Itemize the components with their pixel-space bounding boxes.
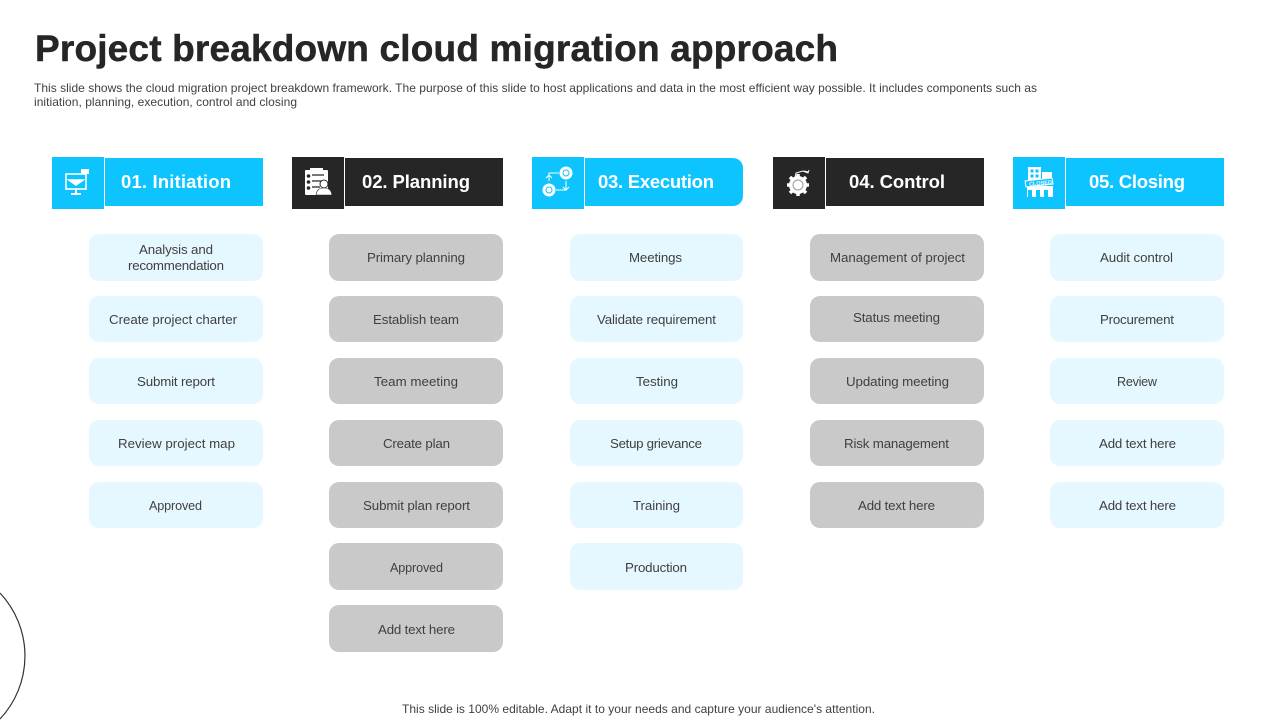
title: Project breakdown cloud migration approach bbox=[35, 28, 838, 69]
panel: 02 planning bbox=[292, 157, 503, 652]
step: team meeting: Team meeting bbox=[374, 374, 458, 389]
step: testing bbox=[570, 358, 743, 404]
step: risk management: Risk management bbox=[844, 436, 949, 451]
panel: 03 execution bbox=[532, 157, 743, 590]
step: status meeting: Status meeting bbox=[853, 310, 940, 325]
header: 02 planning: 02. Planning bbox=[362, 171, 470, 192]
footer note: This slide is 100% editable. Adapt it to your needs and capture your audience's attention. bbox=[402, 702, 875, 716]
step: analysis and recommendation bbox=[89, 234, 263, 281]
header: 04 control bbox=[773, 157, 984, 209]
step: add text here: Add text here bbox=[378, 622, 455, 637]
step: management of project bbox=[810, 234, 984, 281]
header: 01 initiation: 01. Initiation bbox=[121, 171, 231, 192]
step: meetings: Meetings bbox=[629, 250, 682, 265]
step: analysis and recommendation: recommendation bbox=[128, 258, 224, 273]
header: 05 closing bbox=[1013, 157, 1224, 209]
description text: This slide shows the cloud migration project breakdown framework. The purpose of this slide to host applications and data in the most efficient way possible. It includes components such as bbox=[34, 81, 1037, 95]
step: submit report: Submit report bbox=[137, 374, 215, 389]
step: review bbox=[1050, 358, 1224, 404]
description text bbox=[34, 81, 1037, 109]
panel: 04 control bbox=[773, 157, 984, 528]
step: primary planning bbox=[329, 234, 503, 281]
icon: checklist with person bbox=[305, 168, 332, 195]
step: training bbox=[570, 482, 743, 528]
icon: process cycle bbox=[542, 166, 572, 196]
step: establish team bbox=[329, 296, 503, 342]
step: add text here: Add text here bbox=[1099, 498, 1176, 513]
step: procurement: Procurement bbox=[1100, 312, 1174, 327]
step: submit plan report: Submit plan report bbox=[363, 498, 470, 513]
step: primary planning: Primary planning bbox=[367, 250, 465, 265]
step: create plan: Create plan bbox=[383, 436, 450, 451]
step: add text here: Add text here bbox=[858, 498, 935, 513]
step: validate requirement: Validate requirement bbox=[597, 312, 716, 327]
step: testing: Testing bbox=[636, 374, 678, 389]
icon: gear with arm bbox=[787, 170, 809, 196]
step: establish team: Establish team bbox=[373, 312, 459, 327]
step: add text here bbox=[810, 482, 984, 528]
step: add text here bbox=[1050, 420, 1224, 466]
step: audit control: Audit control bbox=[1100, 250, 1173, 265]
step: add text here bbox=[329, 605, 503, 652]
step: review project map bbox=[89, 420, 263, 466]
step: review: Review bbox=[1117, 375, 1158, 389]
header: 02 planning bbox=[292, 157, 503, 209]
step: validate requirement bbox=[570, 296, 743, 342]
step: risk management bbox=[810, 420, 984, 466]
step: create project charter bbox=[89, 296, 263, 342]
step: analysis and recommendation: Analysis and bbox=[139, 242, 213, 257]
header: 01 initiation bbox=[52, 157, 263, 209]
step: setup grievance bbox=[570, 420, 743, 466]
step: production bbox=[570, 543, 743, 590]
icon: closed building bbox=[1025, 167, 1053, 197]
description text: initiation, planning, execution, control and closing bbox=[34, 95, 297, 109]
step: approved bbox=[329, 543, 503, 590]
step: submit plan report bbox=[329, 482, 503, 528]
step: approved: Approved bbox=[149, 499, 202, 513]
header: 03 execution bbox=[532, 157, 743, 209]
step: audit control bbox=[1050, 234, 1224, 281]
step: review project map: Review project map bbox=[118, 436, 235, 451]
step: production: Production bbox=[625, 560, 687, 575]
panel: 01 initiation bbox=[52, 157, 263, 528]
step: add text here bbox=[1050, 482, 1224, 528]
panel: 05 closing bbox=[1013, 157, 1224, 528]
step: create plan bbox=[329, 420, 503, 466]
icon: closed building: CLOSED bbox=[1029, 180, 1052, 188]
step: approved: Approved bbox=[390, 561, 443, 575]
icon: monitor bbox=[66, 169, 89, 194]
step: team meeting bbox=[329, 358, 503, 404]
step: approved bbox=[89, 482, 263, 528]
step: submit report bbox=[89, 358, 263, 404]
step: management of project: Management of project bbox=[830, 250, 965, 265]
step: status meeting bbox=[810, 296, 984, 342]
header: 04 control: 04. Control bbox=[849, 171, 945, 192]
decorative circle outline bbox=[0, 593, 25, 719]
step: updating meeting bbox=[810, 358, 984, 404]
step: create project charter: Create project charter bbox=[109, 312, 238, 327]
step: meetings bbox=[570, 234, 743, 281]
step: procurement bbox=[1050, 296, 1224, 342]
header: 05 closing: 05. Closing bbox=[1089, 171, 1185, 192]
step: setup grievance: Setup grievance bbox=[610, 436, 702, 451]
header: 03 execution: 03. Execution bbox=[598, 171, 714, 192]
step: training: Training bbox=[633, 498, 680, 513]
step: updating meeting: Updating meeting bbox=[846, 374, 949, 389]
step: add text here: Add text here bbox=[1099, 436, 1176, 451]
